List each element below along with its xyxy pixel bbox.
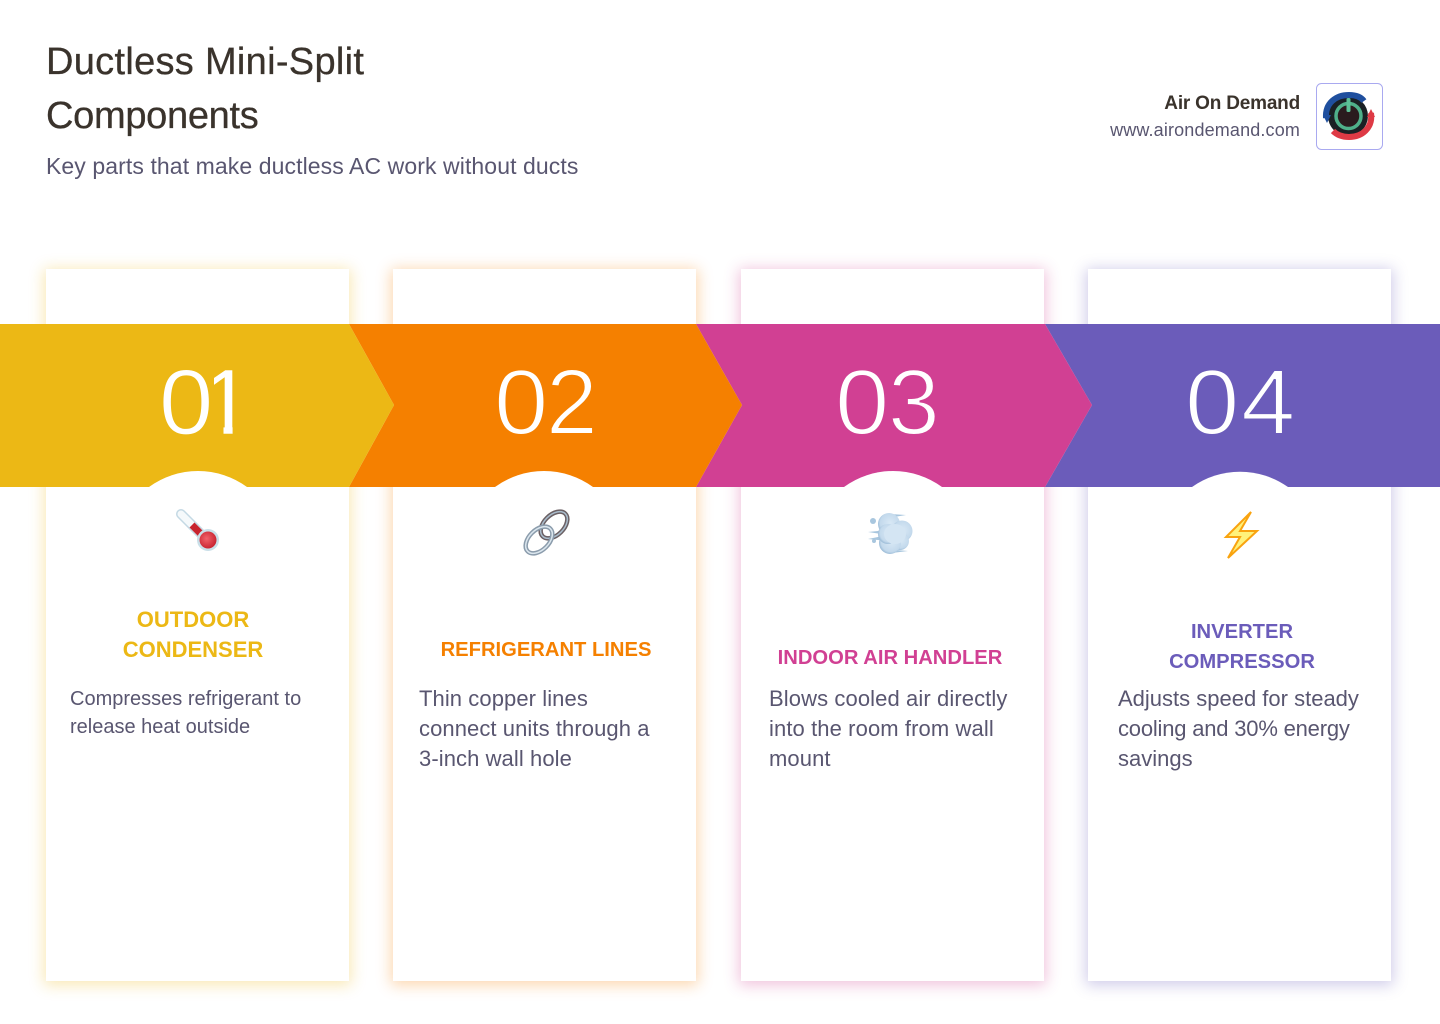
brand name: Air On Demand bbox=[1164, 93, 1300, 114]
card 3 text: Blows cooled air directly bbox=[769, 686, 1007, 711]
card 3 text: into the room from wall bbox=[769, 716, 994, 741]
card 4 text: Adjusts speed for steady bbox=[1118, 686, 1359, 711]
card 1 text: release heat outside bbox=[70, 716, 250, 738]
number 01: 1 bbox=[201, 350, 253, 454]
card 1 text: Compresses refrigerant to bbox=[70, 688, 301, 710]
icon: wind cloud bbox=[868, 513, 912, 554]
card 3 text bbox=[769, 686, 1008, 771]
card 4 heading bbox=[1169, 621, 1315, 673]
brand url: www.airondemand.com bbox=[1110, 120, 1300, 140]
card 4 bbox=[1088, 269, 1391, 981]
title: Components bbox=[46, 95, 258, 137]
card 2 text: 3-inch wall hole bbox=[419, 746, 572, 771]
card 4 text: cooling and 30% energy bbox=[1118, 716, 1350, 741]
number 03 bbox=[835, 350, 940, 454]
title: Ductless Mini-Split bbox=[46, 41, 364, 83]
number 03: 0 bbox=[835, 350, 889, 454]
number 02: 0 bbox=[494, 350, 548, 454]
card 2 text: connect units through a bbox=[419, 716, 650, 741]
icon: thermometer bbox=[176, 509, 219, 551]
icon: lightning bolt bbox=[1224, 511, 1260, 559]
arrow band bbox=[0, 324, 1440, 487]
card 1 text bbox=[70, 688, 301, 738]
card 2 bbox=[393, 269, 696, 981]
card 1 heading: CONDENSER bbox=[123, 637, 263, 662]
card 1 bbox=[46, 269, 349, 981]
number 02: 2 bbox=[546, 350, 598, 454]
card 3 text: mount bbox=[769, 746, 831, 771]
number 04 bbox=[1185, 350, 1295, 454]
icon: chain link bbox=[523, 509, 570, 556]
number 04: 4 bbox=[1241, 350, 1295, 454]
card 2 text: Thin copper lines bbox=[419, 686, 588, 711]
card 4 heading: INVERTER bbox=[1191, 621, 1293, 643]
card 4 text: savings bbox=[1118, 746, 1193, 771]
title bbox=[46, 41, 364, 137]
subtitle: Key parts that make ductless AC work without ducts bbox=[46, 153, 578, 179]
number 03: 3 bbox=[888, 350, 940, 454]
card 1 heading bbox=[123, 607, 263, 662]
card 3 heading: INDOOR AIR HANDLER bbox=[778, 647, 1002, 669]
number 04: 0 bbox=[1185, 350, 1239, 454]
logo bbox=[1316, 83, 1383, 150]
card 1 heading: OUTDOOR bbox=[137, 607, 249, 632]
card 4 text bbox=[1118, 686, 1359, 771]
number 01: 0 bbox=[159, 350, 213, 454]
card 2 text bbox=[419, 686, 650, 771]
card 2 heading: REFRIGERANT LINES bbox=[441, 639, 651, 661]
number 02 bbox=[494, 350, 598, 454]
card 3 bbox=[741, 269, 1044, 981]
card 4 heading: COMPRESSOR bbox=[1169, 651, 1315, 673]
